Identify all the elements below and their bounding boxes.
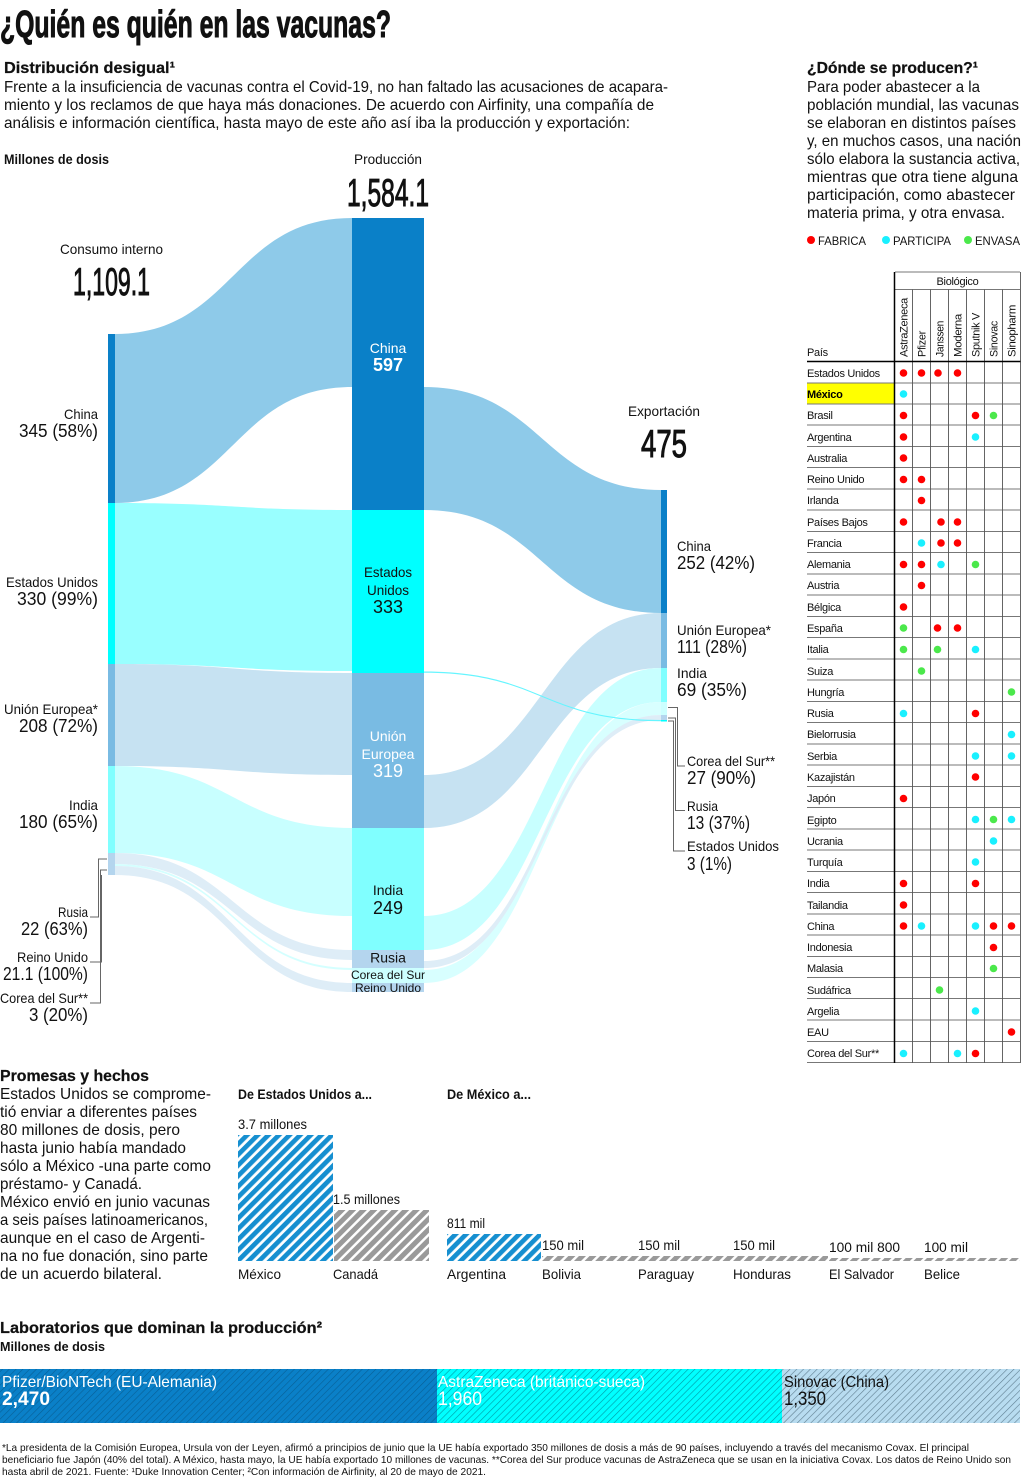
bar chart: de México a: Belice (924, 1266, 960, 1282)
labels: producción por país (351, 340, 425, 995)
labels: exportación por país: Rusia (687, 798, 718, 814)
labels: consumo interno por país: India (69, 797, 98, 813)
connector lines: países pequeños exportación (668, 708, 685, 851)
header: consumo interno (60, 241, 163, 304)
yellow highlight: México (807, 383, 894, 404)
country names: Malasia (807, 963, 844, 975)
country names: Rusia (807, 708, 835, 720)
bar chart: de Estados Unidos a: 1.5 millones (333, 1191, 400, 1207)
table headers: Moderna (952, 313, 964, 357)
paragraph: na no fue donación, sino parte (0, 1248, 208, 1265)
labels: exportación por país: Unión Europea* (677, 622, 772, 638)
chart unit label: Millones de dosis (4, 152, 109, 167)
country names: Suiza (807, 666, 834, 678)
country names: Bélgica (807, 602, 842, 614)
country names: Tailandia (807, 900, 849, 912)
country names: Sudáfrica (807, 985, 852, 997)
country names: Argelia (807, 1006, 840, 1018)
stacked bar: laboratorios (0, 1369, 1020, 1423)
footnotes and sources: beneficiario fue Japón (40% del total). A México, hasta mayo, la UE había exportado 10 millones de vacunas. **Corea del Sur produce vacunas de AstraZeneca que se usan en la iniciativa Covax. Los datos de Reino Unido son (2, 1454, 1011, 1466)
heading: Laboratorios: Laboratorios que dominan la producción² (0, 1320, 322, 1337)
table headers: Sinovac (988, 320, 1000, 357)
labels: exportación por país: India (677, 665, 707, 681)
stacked bar: laboratorios: 1,350 (784, 1389, 826, 1410)
bar chart: de México a: Bolivia (542, 1266, 581, 1282)
bar: producción (352, 218, 424, 992)
legend (807, 234, 1020, 248)
labels: exportación por país: 111 (28%) (677, 637, 747, 657)
dots: fabrica (900, 369, 1015, 1057)
country names: Ucrania (807, 836, 844, 848)
labels: exportación por país: China (677, 538, 711, 554)
bar chart: de Estados Unidos a: 3.7 millones (238, 1116, 307, 1132)
country names: Hungría (807, 687, 845, 699)
country names: Italia (807, 644, 830, 656)
header: consumo interno: Consumo interno (60, 241, 163, 257)
bar chart: de México a: Paraguay (638, 1266, 694, 1282)
heading: Distribución desigual: Distribución desigual¹ (4, 60, 175, 77)
country names: Argentina (807, 432, 853, 444)
labels: exportación por país: 69 (35%) (677, 680, 747, 700)
heading: Promesas y hechos: Promesas y hechos (0, 1068, 149, 1085)
legend: ENVASA (975, 234, 1020, 248)
labels: exportación por país: 13 (37%) (687, 813, 750, 833)
labels: producción por país: 249 (373, 898, 403, 918)
labels: exportación por país: Corea del Sur** (687, 753, 775, 769)
paragraph: a seis países latinoamericanos, (0, 1212, 208, 1229)
header: exportación: 475 (641, 423, 687, 466)
paragraph: materia prima, y otra envasa. (807, 205, 1005, 222)
labels: producción por país: India (373, 882, 403, 898)
labels: producción por país: Reino Unido (355, 981, 421, 995)
country names: Egipto (807, 815, 837, 827)
footnotes and sources (2, 1442, 1011, 1477)
country names: Japón (807, 793, 836, 805)
labels: producción por país: 597 (373, 355, 403, 375)
labels: producción por país: China (370, 340, 406, 356)
paragraph: hasta junio había mandado (0, 1140, 186, 1157)
sankey chart: producción, consumo interno y exportación (0, 151, 779, 1025)
country names: Países Bajos (807, 517, 868, 529)
dots: envasa (900, 412, 1015, 994)
paragraph: 80 millones de dosis, pero (0, 1122, 180, 1139)
labels: producción por país: Estados (364, 564, 412, 580)
paragraph (0, 1086, 211, 1283)
country names: India (807, 878, 831, 890)
labels: producción por país: Europea (362, 746, 415, 762)
stacked bar: laboratorios: 1,960 (438, 1389, 482, 1410)
labels: producción por país: Unidos (367, 582, 409, 598)
bar chart: de Estados Unidos a: Canadá (333, 1266, 378, 1282)
labels: exportación por país: 27 (90%) (687, 768, 756, 788)
table headers: AstraZeneca (898, 297, 910, 357)
bar chart: de México a: 811 mil (447, 1215, 485, 1231)
labels: consumo interno por país: Unión Europea* (4, 701, 99, 717)
labels: consumo interno por país: Reino Unido (17, 949, 88, 965)
paragraph: préstamo- y Canadá. (0, 1176, 142, 1193)
labels: consumo interno por país: 345 (58%) (19, 421, 98, 441)
header: producción (347, 151, 429, 215)
bar: consumo interno (108, 334, 115, 875)
intro paragraph (4, 79, 668, 132)
heading: ¿Dónde se producen?: ¿Dónde se producen?¹ (807, 60, 978, 77)
labels: consumo interno por país: 21.1 (100%) (3, 964, 88, 984)
panel: Promesas y hechos (0, 1068, 1020, 1283)
country names: México (807, 389, 843, 401)
connector lines: países pequeños consumo interno (90, 859, 107, 1003)
table grid (807, 272, 1020, 1063)
country names: Indonesia (807, 942, 853, 954)
bar chart: de Estados Unidos a (238, 1087, 429, 1282)
footnotes and sources: *La presidenta de la Comisión Europea, Ursula von der Leyen, afirmó a principios de junio que la UE había exportado 350 millones de dosis a más de 90 países, incluyendo a través del mecanismo Covax. El principal (2, 1442, 969, 1454)
paragraph (807, 79, 1021, 222)
stacked bar: laboratorios: 2,470 (2, 1389, 50, 1410)
stacked bar: laboratorios: Pfizer/BioNTech (EU-Alemania) (2, 1374, 217, 1391)
labels: producción por país: Rusia (370, 950, 406, 966)
bar chart: de Estados Unidos a: México (238, 1266, 281, 1282)
dots: participa (900, 390, 1015, 1057)
country names: Reino Unido (807, 474, 864, 486)
labels: consumo interno por país: 180 (65%) (19, 812, 98, 832)
paragraph: se elaboran en distintos países (807, 115, 1016, 132)
labels: consumo interno por país: 22 (63%) (21, 919, 88, 939)
labels: exportación por país (677, 538, 779, 874)
bar chart: de México a: Argentina (447, 1266, 506, 1282)
paragraph: participación, como abastecer (807, 187, 1016, 204)
country names (807, 368, 881, 1060)
table headers: País (807, 347, 829, 359)
bar chart: de México a: 150 mil (542, 1237, 584, 1253)
labels: consumo interno por país: Rusia (58, 904, 88, 920)
bar chart: de México a (447, 1087, 1020, 1282)
labels: exportación por país: 252 (42%) (677, 553, 755, 573)
country names: Estados Unidos (807, 368, 881, 380)
stacked bar: laboratorios: AstraZeneca (británico-sueca) (438, 1374, 645, 1391)
table headers: Janssen (934, 321, 946, 357)
country names: Australia (807, 453, 848, 465)
intro paragraph: miento y los reclamos de que haya más donaciones. De acuerdo con Airfinity, una compañía de (4, 97, 654, 114)
intro paragraph: Frente a la insuficiencia de vacunas contra el Covid-19, no han faltado las acusaciones de acapara- (4, 79, 668, 96)
country names: EAU (807, 1027, 829, 1039)
panel: Laboratorios que dominan la producción (0, 1320, 1020, 1423)
paragraph: sólo a México -una parte como (0, 1158, 211, 1175)
paragraph: México envió en junio vacunas (0, 1194, 210, 1211)
country names: Brasil (807, 410, 833, 422)
labels: exportación por país: 3 (1%) (687, 854, 732, 874)
table headers: Biológico (937, 276, 979, 288)
paragraph: de un acuerdo bilateral. (0, 1266, 162, 1283)
table headers (807, 276, 1018, 359)
bar chart: de México a: De México a... (447, 1087, 531, 1102)
header: producción: 1,584.1 (347, 172, 429, 215)
bar chart: de México a: 150 mil (733, 1237, 775, 1253)
labels: consumo interno por país: 3 (20%) (29, 1005, 88, 1025)
bar chart: de Estados Unidos a: De Estados Unidos a... (238, 1087, 372, 1102)
paragraph: población mundial, las vacunas (807, 97, 1019, 114)
labels: consumo interno por país: 208 (72%) (19, 716, 98, 736)
stacked bar: laboratorios: Sinovac (China) (784, 1374, 889, 1391)
country names: Alemania (807, 559, 852, 571)
labels: consumo interno por país: Corea del Sur** (0, 990, 88, 1006)
country names: Irlanda (807, 495, 840, 507)
country names: Corea del Sur** (807, 1048, 880, 1060)
legend: FABRICA (818, 234, 866, 248)
table: países y biológicos (807, 272, 1020, 1063)
labels: consumo interno por país: 330 (99%) (17, 589, 98, 609)
country names: Kazajistán (807, 772, 855, 784)
labels: producción por país: 319 (373, 761, 403, 781)
intro text block: Distribución desigual (4, 60, 668, 132)
bar chart: de México a: 100 mil 800 (829, 1239, 900, 1255)
labels: producción por país: 333 (373, 597, 403, 617)
header: exportación: Exportación (628, 403, 700, 419)
bar chart: de México a: El Salvador (829, 1266, 894, 1282)
bar chart: de México a: 150 mil (638, 1237, 680, 1253)
legend: PARTICIPA (893, 234, 951, 248)
labels: consumo interno por país: Estados Unidos (6, 574, 98, 590)
labels: producción por país: Unión (370, 728, 406, 744)
country names: España (807, 623, 844, 635)
labels: exportación por país: Estados Unidos (687, 838, 779, 854)
table headers: Pfizer (916, 330, 928, 357)
paragraph: tió enviar a diferentes países (0, 1104, 197, 1121)
country names: Bielorrusia (807, 729, 857, 741)
country names: Serbia (807, 751, 838, 763)
labels: consumo interno por país: China (64, 406, 98, 422)
country names: China (807, 921, 835, 933)
country names: Francia (807, 538, 843, 550)
paragraph: mientras que otra tiene alguna (807, 169, 1018, 186)
bar chart: de México a: 100 mil (924, 1239, 968, 1255)
paragraph: aunque en el caso de Argenti- (0, 1230, 205, 1247)
header: exportación (628, 403, 700, 466)
bar: exportación (661, 490, 667, 722)
subheading: Millones de dosis (0, 1340, 105, 1354)
paragraph: Estados Unidos se comprome- (0, 1086, 211, 1103)
table headers: Sputnik V (970, 312, 982, 357)
header: producción: Producción (354, 151, 422, 167)
country names: Turquía (807, 857, 844, 869)
intro paragraph: análisis e información científica, hasta mayo de este año así iba la producción y exportación: (4, 115, 630, 132)
header: consumo interno: 1,109.1 (73, 261, 150, 304)
table headers: Sinopharm (1006, 305, 1018, 357)
flows: consumo interno to producción (115, 218, 352, 992)
flows: producción to exportación (424, 387, 661, 983)
panel: ¿Dónde se producen? (807, 60, 1021, 1063)
labels: consumo interno por país (0, 406, 99, 1025)
paragraph: Para poder abastecer a la (807, 79, 980, 96)
bar chart: de México a: Honduras (733, 1266, 791, 1282)
country names: Austria (807, 580, 840, 592)
title: ¿Quién es quién en las vacunas? (0, 4, 391, 46)
labels: producción por país: Corea del Sur (351, 968, 425, 982)
